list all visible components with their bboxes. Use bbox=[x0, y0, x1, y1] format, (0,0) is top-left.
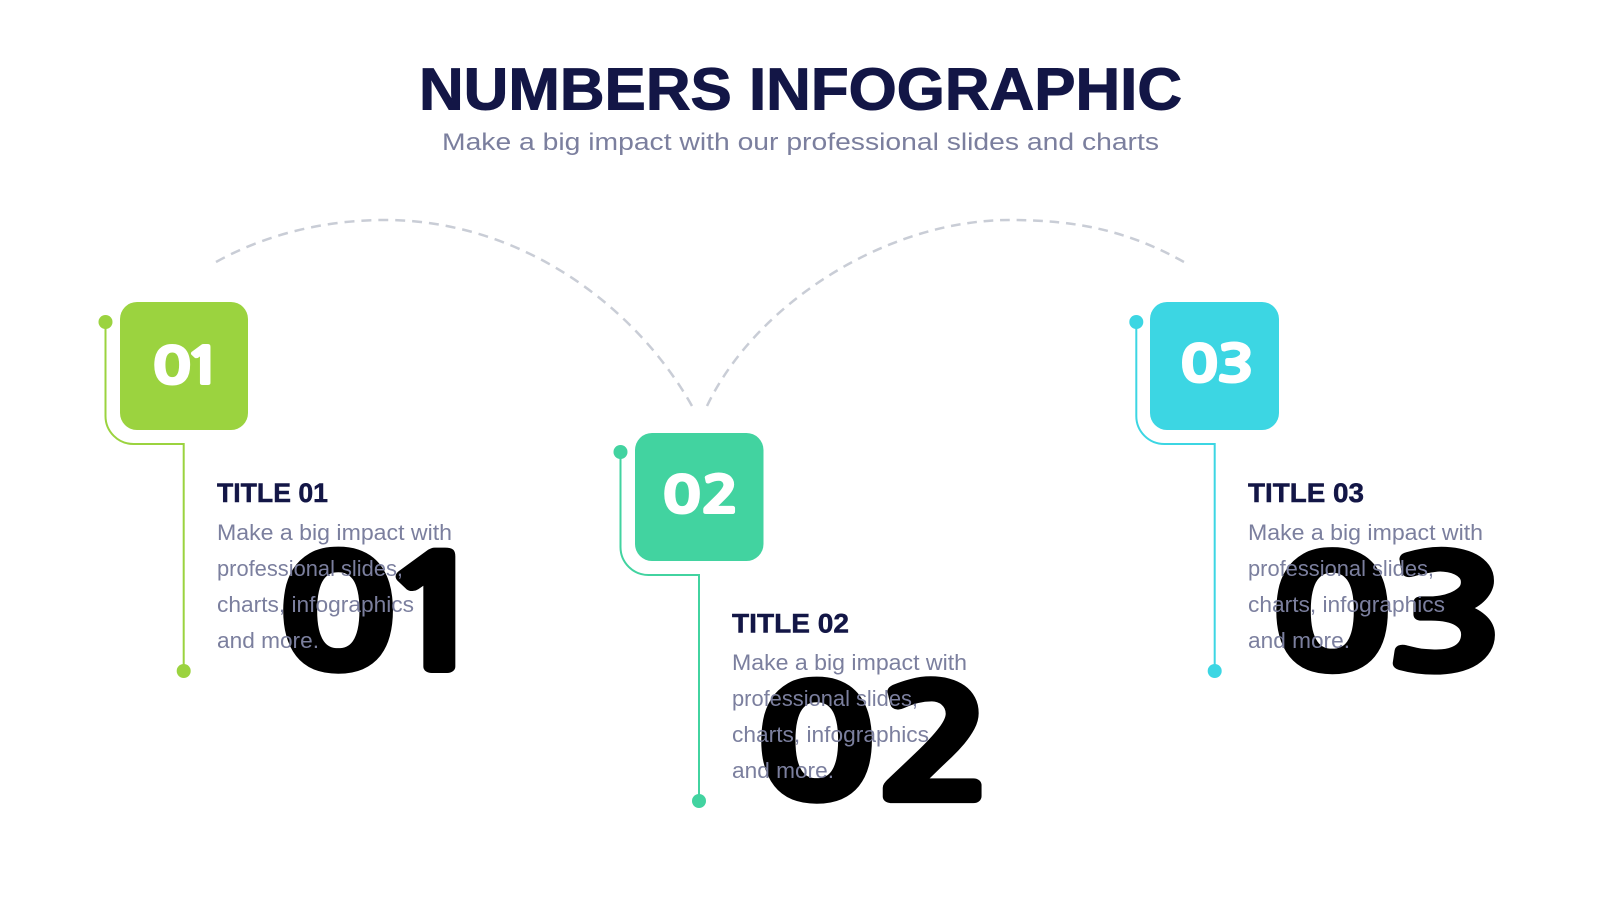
big number 01: 0 bbox=[278, 539, 397, 691]
description 02: and more. bbox=[732, 758, 834, 783]
description 02: professional slides, bbox=[732, 686, 918, 711]
connector dot top 02 bbox=[614, 445, 628, 459]
panel: step 01 bbox=[98, 302, 494, 691]
dashed arc: from 01 to 02 bbox=[216, 220, 692, 406]
connector line 03 bbox=[1136, 322, 1215, 671]
number card 01: 1 bbox=[185, 342, 223, 392]
description 03 bbox=[1248, 520, 1483, 653]
description 01: Make a big impact with bbox=[217, 520, 452, 545]
heading 02: TITLE 02 bbox=[732, 608, 849, 638]
dashed arc: from 02 to 03 bbox=[707, 220, 1184, 406]
description 01 bbox=[217, 520, 452, 653]
panel: step 02 bbox=[614, 433, 993, 821]
number card 03 bbox=[1150, 302, 1279, 430]
panel: step 03 bbox=[1129, 302, 1505, 692]
description 03: charts, infographics bbox=[1248, 592, 1445, 617]
description 01: professional slides, bbox=[217, 556, 403, 581]
number card 02 bbox=[635, 433, 764, 561]
big number 01: 1 bbox=[376, 539, 494, 691]
connector dot top 01 bbox=[98, 315, 112, 329]
connector dot bottom 03 bbox=[1208, 664, 1222, 678]
title: NUMBERS INFOGRAPHIC bbox=[419, 56, 1182, 122]
big number 03 bbox=[1271, 540, 1505, 692]
number card 02: 0 bbox=[663, 472, 701, 520]
big number 02 bbox=[756, 669, 993, 821]
description 01: and more. bbox=[217, 628, 319, 653]
big number 03: 0 bbox=[1271, 540, 1392, 692]
description 02: Make a big impact with bbox=[732, 650, 967, 675]
big number 03: 3 bbox=[1387, 540, 1505, 692]
description 03: professional slides, bbox=[1248, 556, 1434, 581]
number card 02: 2 bbox=[702, 472, 739, 520]
description 01: charts, infographics bbox=[217, 592, 414, 617]
number card 03: 3 bbox=[1217, 340, 1254, 390]
connector line 01 bbox=[106, 322, 184, 671]
subtitle: Make a big impact with our professional slides and charts bbox=[442, 129, 1159, 156]
connector dot bottom 01 bbox=[177, 664, 191, 678]
heading 03: TITLE 03 bbox=[1248, 478, 1364, 508]
description 03: Make a big impact with bbox=[1248, 520, 1483, 545]
description 02 bbox=[732, 650, 967, 783]
description 02: charts, infographics bbox=[732, 722, 929, 747]
number card 03: 0 bbox=[1180, 340, 1218, 390]
connector line 02 bbox=[620, 452, 699, 801]
number card 01: 0 bbox=[153, 342, 192, 392]
heading 01: TITLE 01 bbox=[217, 478, 328, 508]
big number 01 bbox=[278, 539, 494, 691]
description 03: and more. bbox=[1248, 628, 1350, 653]
connector dot bottom 02 bbox=[692, 794, 706, 808]
big number 02: 2 bbox=[878, 669, 993, 821]
number card 01 bbox=[120, 302, 248, 430]
big number 02: 0 bbox=[756, 669, 876, 821]
connector dot top 03 bbox=[1129, 315, 1143, 329]
